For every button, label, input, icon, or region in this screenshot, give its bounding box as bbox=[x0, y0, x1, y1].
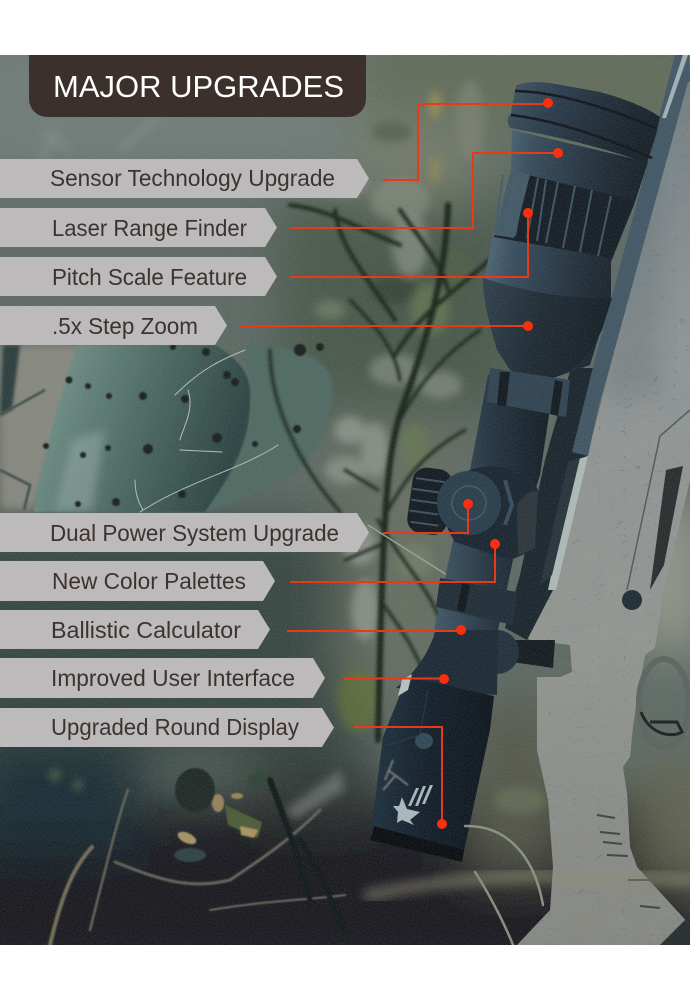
rifle scope bbox=[370, 82, 660, 862]
label: Improved User Interface bbox=[0, 658, 325, 698]
cactus spines bbox=[43, 343, 324, 507]
callout line: .5x Step Zoom bbox=[240, 321, 533, 331]
callout line: Improved User Interface bbox=[344, 674, 449, 684]
callout line: New Color Palettes bbox=[290, 539, 500, 582]
rear body bbox=[370, 677, 494, 860]
label: Dual Power System Upgrade: Dual Power System Upgrade bbox=[50, 520, 339, 546]
magnification ring bbox=[494, 171, 633, 258]
title banner: MAJOR UPGRADES bbox=[53, 69, 344, 104]
zoom cone bbox=[396, 630, 498, 695]
label: .5x Step Zoom: .5x Step Zoom bbox=[52, 313, 198, 339]
callout line: Upgraded Round Display bbox=[354, 727, 447, 829]
rail and mount bbox=[505, 368, 593, 640]
rifle barrel bbox=[593, 55, 690, 367]
straw stalk bbox=[368, 525, 447, 575]
pale stalks top left bbox=[47, 133, 60, 145]
turret body bbox=[442, 466, 541, 560]
label: Pitch Scale Feature: Pitch Scale Feature bbox=[52, 264, 247, 290]
callout line: Dual Power System Upgrade bbox=[383, 499, 473, 533]
scope main tube bbox=[433, 375, 552, 635]
bell cone bbox=[483, 278, 612, 378]
label: .5x Step Zoom bbox=[0, 306, 227, 345]
scope ring upper bbox=[487, 368, 570, 417]
bush leaves and branches bbox=[310, 80, 546, 814]
label: Upgraded Round Display bbox=[0, 708, 334, 747]
callout line: Laser Range Finder bbox=[290, 148, 563, 228]
eyepiece cap bbox=[508, 82, 660, 163]
turret knob bbox=[407, 468, 451, 535]
label: Upgraded Round Display: Upgraded Round Display bbox=[51, 714, 299, 740]
cactus main pad bbox=[33, 345, 250, 512]
bolt handle bbox=[512, 640, 555, 668]
label: Dual Power System Upgrade bbox=[0, 513, 369, 552]
callout line: Sensor Technology Upgrade bbox=[383, 98, 553, 180]
undergrowth leaves bbox=[174, 768, 268, 862]
label: Improved User Interface: Improved User Interface bbox=[51, 665, 295, 691]
scope body upper bbox=[483, 130, 648, 378]
label: New Color Palettes: New Color Palettes bbox=[52, 568, 246, 594]
label: Sensor Technology Upgrade: Sensor Technology Upgrade bbox=[50, 165, 335, 191]
stock slot bbox=[650, 466, 683, 590]
foreground grass bbox=[50, 780, 345, 945]
label: Laser Range Finder bbox=[0, 208, 277, 247]
callout line: Pitch Scale Feature bbox=[290, 208, 533, 277]
label: Ballistic Calculator: Ballistic Calculator bbox=[51, 617, 241, 643]
label: Ballistic Calculator bbox=[0, 610, 270, 649]
rifle stock bbox=[510, 80, 690, 950]
foreground grass over stock bbox=[370, 826, 690, 945]
lower scope ring bbox=[436, 578, 517, 625]
icon: star logo bbox=[393, 785, 433, 825]
cactus back pad bbox=[200, 345, 333, 512]
label: New Color Palettes bbox=[0, 561, 275, 601]
trigger guard bbox=[636, 656, 690, 736]
label: Pitch Scale Feature bbox=[0, 257, 277, 296]
title banner bbox=[29, 55, 366, 117]
label: Sensor Technology Upgrade bbox=[0, 159, 369, 198]
beige backdrop left of cactus bbox=[0, 345, 85, 510]
turret dial bbox=[437, 471, 501, 535]
label: Laser Range Finder: Laser Range Finder bbox=[52, 215, 247, 241]
callout line: Ballistic Calculator bbox=[287, 625, 466, 635]
